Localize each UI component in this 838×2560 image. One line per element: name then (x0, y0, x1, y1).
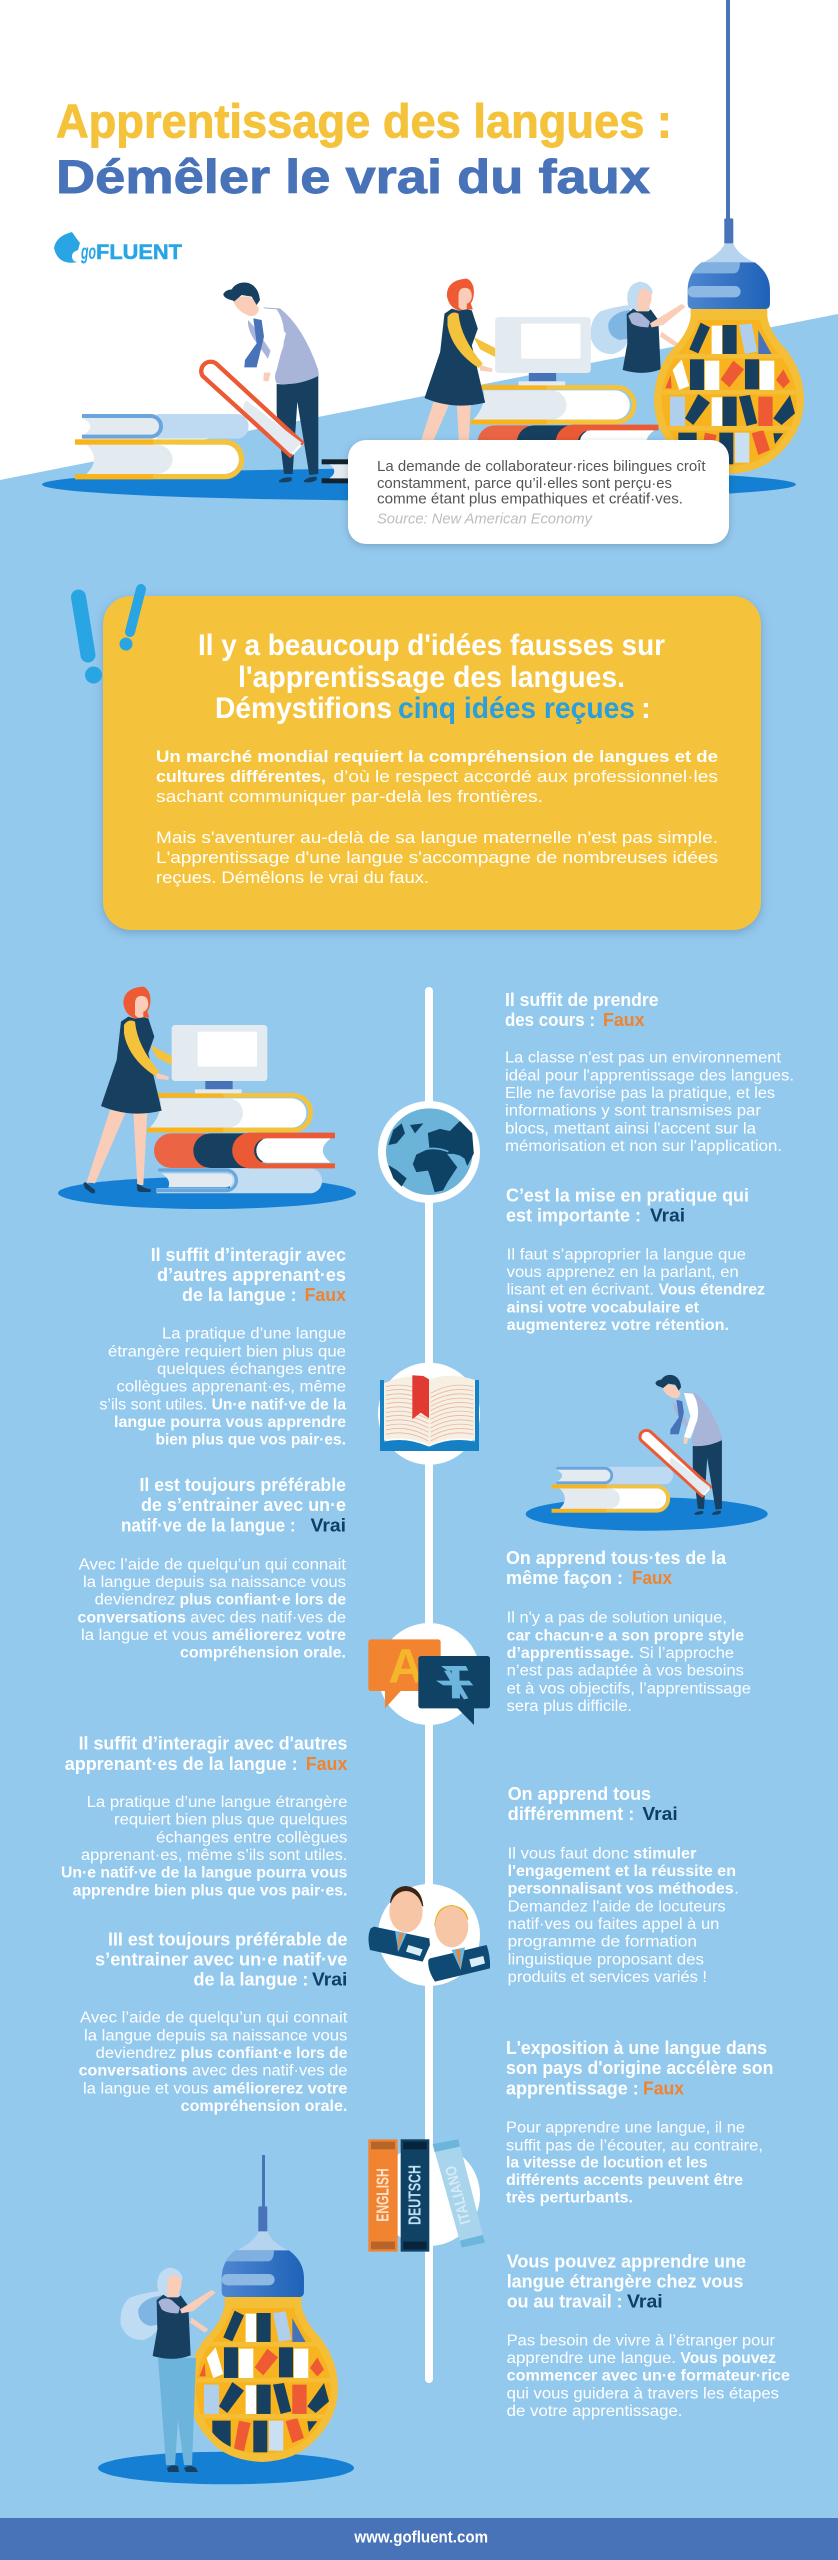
text block: on apprend tous de la meme facon: même façon : (506, 1568, 623, 1588)
intro text: cultures différentes, (156, 767, 326, 786)
text block: exposition a une langue: son pays d'origine accélère son (506, 2058, 773, 2078)
text block: interagir avec d'autres apprenants 1: langue pourra vous apprendre (114, 1414, 346, 1431)
illustration: bookshelf light bulb (654, 218, 804, 474)
text block: natif de la langue 2: améliorerez votre (213, 2080, 348, 2097)
illustration: man with books (75, 283, 318, 482)
intro text (156, 747, 718, 887)
text block: exposition a une langue: Faux (643, 2078, 684, 2098)
text block: on apprend tous differemment: . (734, 1881, 739, 1898)
text block: interagir avec d'autres apprenants 1: Faux (305, 1285, 346, 1305)
text block: on apprend tous de la meme facon: et à vos objectifs, l’apprentissage (507, 1680, 751, 1697)
text block: interagir avec d'autres apprenants 2: apprenant·es, même s’ils sont utiles. (81, 1847, 347, 1864)
text block: natif de la langue 2: Vrai (312, 1970, 347, 1990)
text block: natif de la langue 1: compréhension orale. (180, 1645, 346, 1662)
text block: natif de la langue 1: natif·ve de la langue : (121, 1515, 296, 1535)
text block: on apprend tous differemment: natif·ves ou faites appel à un (508, 1916, 719, 1933)
text block: exposition a une langue: apprentissage : (506, 2078, 639, 2098)
text block: on apprend tous differemment: Demandez l'aide de locuteurs (508, 1898, 726, 1915)
text block: interagir avec d'autres apprenants 1: étrangère requiert bien plus que (108, 1343, 346, 1360)
icon: language books: ENGLISH (372, 2168, 392, 2222)
text block: natif de la langue 2 (79, 1930, 348, 2115)
title: Apprentissage des langues : (56, 94, 672, 148)
text block: natif de la langue 2: deviendrez (96, 2045, 176, 2062)
text block: on apprend tous de la meme facon: sera plus difficile. (507, 1698, 632, 1715)
text block: on apprend tous differemment (508, 1784, 739, 1986)
text block: apprendre chez vous: langue étrangère chez vous (507, 2271, 743, 2291)
icon: translation speech bubbles: A (388, 1639, 423, 1693)
text block: on apprend tous differemment: différemment : (508, 1804, 634, 1824)
text block: il suffit de prendre des cours: La classe n'est pas un environnement (505, 1050, 782, 1067)
text block: apprendre chez vous: de votre apprentissage. (507, 2403, 682, 2420)
callout card (348, 440, 729, 544)
text block: on apprend tous differemment: On apprend tous (508, 1784, 651, 1804)
text block: natif de la langue 1 (78, 1475, 347, 1662)
text block: on apprend tous de la meme facon: car chacun·e a son propre style (507, 1627, 744, 1644)
text block: exposition a une langue: suffit pas de l’écouter, au contraire, (506, 2137, 763, 2154)
callout card: La demande de collaborateur·rices bilingues croît (377, 459, 706, 475)
text block: interagir avec d'autres apprenants 1: bien plus que vos pair·es. (156, 1432, 346, 1449)
text block: natif de la langue 1: améliorerez votre (212, 1627, 346, 1644)
icon: open book (380, 1375, 479, 1451)
text block: interagir avec d'autres apprenants 1: La pratique d’une langue (162, 1326, 346, 1343)
text block: apprendre chez vous: commencer avec un·e formateur·rice (507, 2368, 790, 2385)
footer (0, 2518, 838, 2560)
text block: il suffit de prendre des cours: des cours : (505, 1010, 595, 1030)
panel: introduction (78, 589, 761, 930)
text block: on apprend tous differemment: Il vous faut donc (508, 1845, 629, 1862)
text block: on apprend tous differemment: programme de formation (508, 1934, 697, 1951)
icon: exclamation marks (78, 589, 141, 684)
icon: translation speech bubbles (368, 1639, 490, 1725)
text block: interagir avec d'autres apprenants 2: Faux (306, 1754, 347, 1774)
ground ellipse (42, 468, 796, 500)
text block: natif de la langue 2: conversations (79, 2063, 188, 2080)
illustration: woman with blue hair (590, 282, 686, 373)
text block: interagir avec d'autres apprenants 2: La pratique d’une langue étrangère (87, 1794, 347, 1811)
text block: natif de la langue 2: III est toujours préférable de (108, 1930, 347, 1950)
small book behind card (322, 459, 350, 483)
title (56, 94, 672, 203)
illustration: woman at computer (58, 987, 356, 1209)
text block: il suffit de prendre des cours: blocs, mettant ainsi l'accent sur la (505, 1120, 756, 1137)
text block: interagir avec d'autres apprenants 2: Il suffit d’interagir avec d'autres (79, 1733, 347, 1753)
intro text: Mais s'aventurer au-delà de sa langue maternelle n'est pas simple. (156, 828, 718, 847)
illustration: man with tilted book (526, 1375, 768, 1531)
text block: il suffit de prendre des cours: idéal pour l'apprentissage des langues. (505, 1067, 794, 1084)
text block: on apprend tous differemment: linguistique proposant des (508, 1951, 704, 1968)
text block: mise en pratique (506, 1186, 765, 1334)
text block: mise en pratique: augmenterez votre rétention. (507, 1317, 729, 1334)
text block: interagir avec d'autres apprenants 2: échanges entre collègues (156, 1829, 348, 1846)
intro text: Un marché mondial requiert la compréhension de langues et de (156, 747, 718, 766)
text block: mise en pratique: vous apprenez en la parlant, en (507, 1264, 739, 1281)
text block: natif de la langue 2: plus confiant·e lors de (181, 2045, 348, 2062)
text block: natif de la langue 1: conversations (78, 1609, 186, 1626)
text block: interagir avec d'autres apprenants 2 (61, 1733, 348, 1899)
text block: il suffit de prendre des cours: Faux (603, 1010, 644, 1030)
text block: apprendre chez vous: Vous pouvez apprendre une (507, 2251, 746, 2271)
intro text: L'apprentissage d'une langue s'accompagne de nombreuses idées (156, 848, 718, 867)
hero illustration (42, 0, 804, 500)
text block: exposition a une langue: L'exposition à une langue dans (506, 2038, 767, 2058)
text block: interagir avec d'autres apprenants 2: apprenant·es de la langue : (65, 1754, 298, 1774)
text block: natif de la langue 1: deviendrez (95, 1592, 175, 1609)
icon: two colleagues (368, 1886, 490, 1982)
logo: goFLUENT (54, 232, 182, 264)
text block: interagir avec d'autres apprenants 1: quelques échanges entre (157, 1361, 346, 1378)
text block: natif de la langue 1: la langue depuis sa naissance vous (83, 1574, 346, 1591)
text block: natif de la langue 1: Avec l’aide de quelqu’un qui connait (79, 1556, 347, 1573)
text block: natif de la langue 2: de la langue : (194, 1970, 308, 1990)
text block: natif de la langue 2: la langue depuis sa naissance vous (84, 2027, 348, 2044)
text block: on apprend tous differemment: produits et services variés ! (508, 1969, 707, 1986)
text block: mise en pratique: C’est la mise en pratique qui (506, 1186, 749, 1206)
text block: apprendre chez vous: Vous pouvez (680, 2350, 776, 2367)
text block: apprendre chez vous: Pas besoin de vivre à l’étranger pour (507, 2332, 775, 2349)
illustration: woman at computer on books (407, 279, 658, 485)
text block: interagir avec d'autres apprenants 1 (99, 1245, 346, 1449)
icon: globe (386, 1108, 473, 1195)
lamp cord (726, 0, 730, 220)
text block: on apprend tous de la meme facon: d’apprentissage. (507, 1645, 634, 1662)
footer: www.gofluent.com (354, 2528, 488, 2547)
text block: il suffit de prendre des cours: informations y sont transmises par (505, 1103, 761, 1120)
text block: on apprend tous differemment: l'engagement et la réussite en (508, 1863, 736, 1880)
text block: exposition a une langue: la vitesse de locution et les (506, 2154, 708, 2171)
intro heading: : (641, 692, 651, 725)
text block: natif de la langue 1: Vrai (310, 1515, 346, 1535)
text block: interagir avec d'autres apprenants 1: Il suffit d’interagir avec (151, 1245, 346, 1265)
text block: on apprend tous de la meme facon: n’est pas adaptée à vos besoins (507, 1663, 744, 1680)
text block: mise en pratique: lisant et en écrivant. (507, 1282, 654, 1299)
text block: exposition a une langue (506, 2038, 773, 2207)
timeline (378, 987, 480, 2383)
intro heading: Il y a beaucoup d'idées fausses sur (198, 629, 665, 662)
logo: goFLUENT: go (80, 241, 96, 264)
text block: exposition a une langue: très perturbants. (506, 2190, 633, 2207)
text block: natif de la langue 1: Il est toujours préférable (140, 1475, 346, 1495)
text block: exposition a une langue: Pour apprendre une langue, il ne (506, 2120, 745, 2137)
text block: il suffit de prendre des cours (505, 990, 794, 1155)
text block: natif de la langue 2: avec des natif·ves de (192, 2063, 347, 2080)
text block: il suffit de prendre des cours: Il suffit de prendre (505, 990, 658, 1010)
text block: il suffit de prendre des cours: Elle ne favorise pas la pratique, et les (505, 1085, 775, 1102)
intro heading: Démystifions (215, 692, 392, 725)
text block: on apprend tous de la meme facon (506, 1548, 751, 1715)
text block: natif de la langue 1: avec des natif·ves de (190, 1609, 346, 1626)
text block: natif de la langue 2: s’entrainer avec un·e natif·ve (95, 1950, 347, 1970)
text block: on apprend tous de la meme facon: On apprend tous·tes de la (506, 1548, 727, 1568)
text block: natif de la langue 2: compréhension orale. (181, 2098, 347, 2115)
text block: interagir avec d'autres apprenants 1: de la langue : (182, 1285, 297, 1305)
text block: on apprend tous de la meme facon: Si l’approche (639, 1645, 734, 1662)
text block: exposition a une langue: différents accents peuvent être (506, 2172, 743, 2189)
intro text: sachant communiquer par-delà les frontières. (156, 787, 543, 806)
text block: mise en pratique: ainsi votre vocabulaire et (507, 1299, 699, 1316)
text block: interagir avec d'autres apprenants 2: apprendre bien plus que vos pair·es. (73, 1882, 347, 1899)
text block: natif de la langue 1: la langue et vous (81, 1627, 208, 1644)
text block: interagir avec d'autres apprenants 1: collègues apprenant·es, même (116, 1379, 346, 1396)
text block: mise en pratique: Il faut s’approprier la langue que (507, 1246, 746, 1263)
text block: apprendre chez vous: apprendre une langue. (507, 2350, 676, 2367)
text block: il suffit de prendre des cours: mémorisation et non sur l'application. (505, 1138, 782, 1155)
callout card: comme étant plus empathiques et créatif·ves. (377, 492, 683, 508)
intro heading (198, 629, 665, 725)
title: Démêler le vrai du faux (56, 150, 650, 203)
text block: apprendre chez vous: ou au travail : (507, 2291, 623, 2311)
intro text: reçues. Démêlons le vrai du faux. (156, 868, 429, 887)
intro text: d’où le respect accordé aux professionnel·les (334, 767, 718, 786)
text block: interagir avec d'autres apprenants 1: d’autres apprenant·es (157, 1265, 346, 1285)
text block: on apprend tous differemment: Vrai (642, 1804, 678, 1824)
text block: apprendre chez vous: qui vous guidera à travers les étapes (507, 2385, 779, 2402)
text block: interagir avec d'autres apprenants 1: Un·e natif·ve de la (212, 1396, 346, 1413)
text block: apprendre chez vous (507, 2251, 790, 2420)
text block: on apprend tous differemment: stimuler (633, 1845, 696, 1862)
text block: interagir avec d'autres apprenants 2: Un·e natif·ve de la langue pourra vous (61, 1865, 347, 1882)
text block: on apprend tous de la meme facon: Il n'y a pas de solution unique, (507, 1610, 727, 1627)
text block: mise en pratique: Vous étendrez (658, 1282, 765, 1299)
text block: on apprend tous differemment: personnalisant vos méthodes (508, 1881, 734, 1898)
icon: language books: ITALIANO (442, 2164, 475, 2226)
text block: mise en pratique: Vrai (650, 1206, 685, 1226)
text block: on apprend tous de la meme facon: Faux (632, 1568, 672, 1588)
logo: goFLUENT: FLUENT (96, 241, 182, 264)
text block: interagir avec d'autres apprenants 1: s’ils sont utiles. (99, 1396, 207, 1413)
text block: natif de la langue 1: de s’entrainer avec un·e (141, 1495, 346, 1515)
icon: language books: DEUTSCH (405, 2165, 425, 2225)
text block: apprendre chez vous: Vrai (627, 2291, 663, 2311)
callout card: constamment, parce qu’il·elles sont perçu·es (377, 476, 672, 492)
text block: natif de la langue 1: plus confiant·e lors de (180, 1592, 346, 1609)
text block: interagir avec d'autres apprenants 2: requiert bien plus que quelques (114, 1812, 348, 1829)
text block: mise en pratique: est importante : (506, 1206, 641, 1226)
callout card: Source: New American Economy (377, 512, 593, 528)
illustration: woman and bookshelf bulb (98, 2155, 354, 2484)
icon: language books (368, 2139, 485, 2252)
intro heading: l'apprentissage des langues. (238, 661, 625, 694)
text block: natif de la langue 2: la langue et vous (83, 2080, 209, 2097)
intro heading: cinq idées reçues (398, 692, 635, 725)
text block: natif de la langue 2: Avec l’aide de quelqu’un qui connait (80, 2010, 348, 2027)
